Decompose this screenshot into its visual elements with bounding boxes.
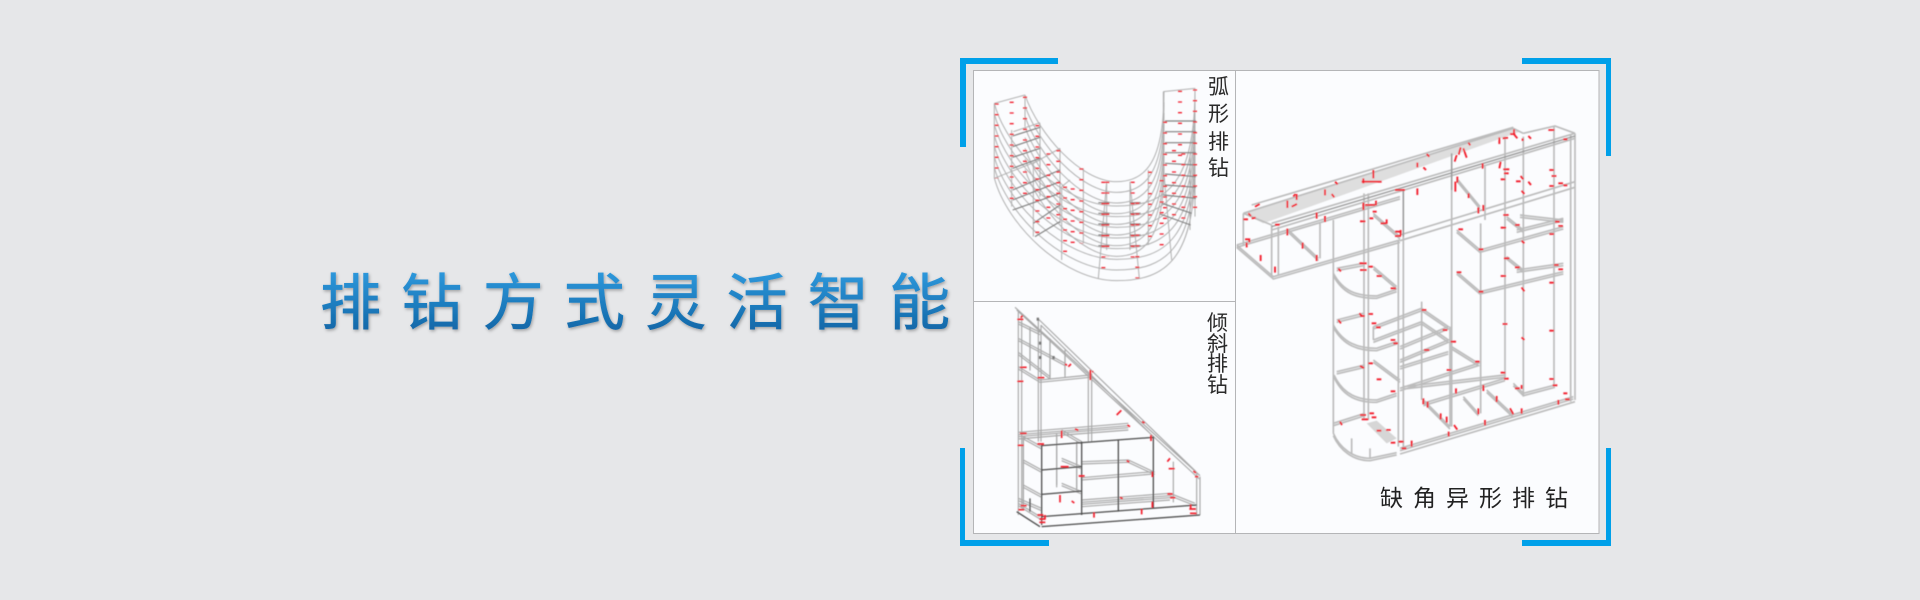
diagram: notched irregular drilling <box>1237 126 1575 461</box>
bracket: bottom left <box>960 448 1049 546</box>
label: notched irregular drilling: 缺角异形排钻 <box>1380 485 1568 511</box>
label: sloped drilling: 倾斜排钻 <box>1207 312 1228 397</box>
bracket: top left <box>960 58 1058 147</box>
title: 排钻方式灵活智能 <box>320 269 950 337</box>
diagram: arc drilling <box>994 88 1196 281</box>
diagram: sloped drilling <box>1015 307 1200 527</box>
bracket: top right <box>1522 58 1611 156</box>
bracket: bottom right <box>1522 448 1611 546</box>
label: arc drilling: 弧形排钻 <box>1208 76 1229 180</box>
panel: drilling diagrams <box>973 70 1599 534</box>
